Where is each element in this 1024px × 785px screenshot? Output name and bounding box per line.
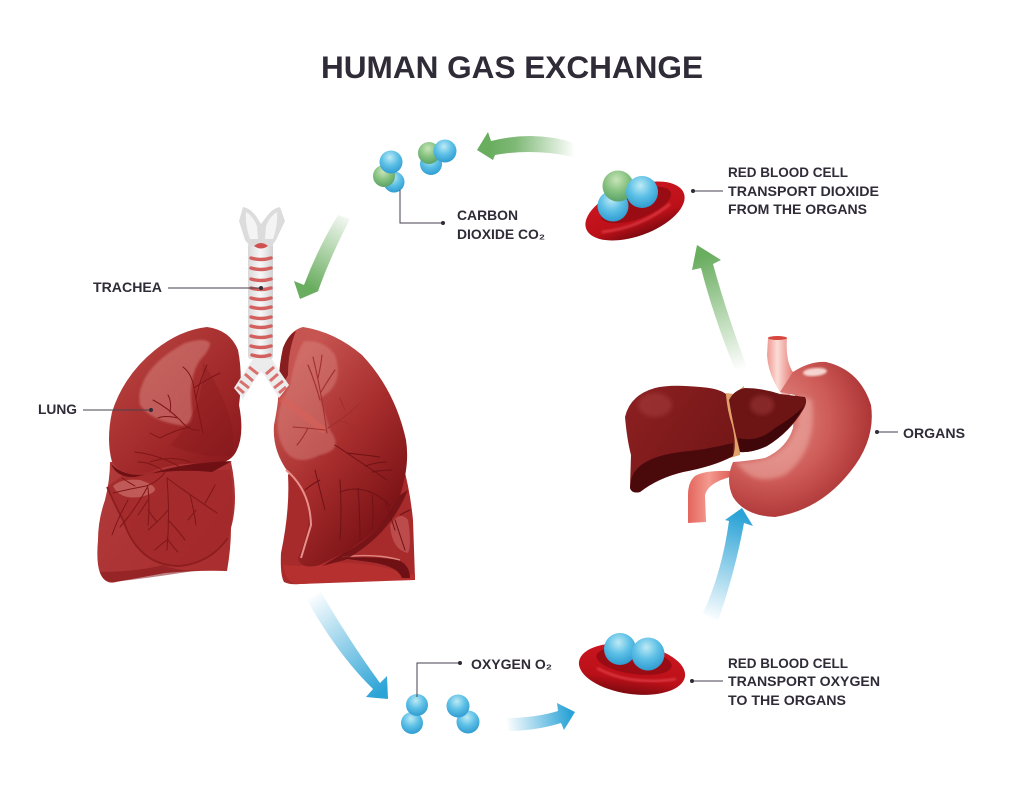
bronchial veins <box>112 365 220 552</box>
arrow: green from organs to red blood cell <box>692 245 748 370</box>
icon: red blood cell carrying carbon dioxide <box>578 170 692 252</box>
label: red blood cell transport dioxide: FROM THE ORGANS <box>728 201 867 217</box>
lower lobe <box>97 462 235 583</box>
label: red blood cell transport dioxide: RED BLOOD CELL <box>728 164 848 180</box>
icon: oxygen molecules <box>401 694 480 734</box>
arrow: blue to red blood cell <box>506 703 575 731</box>
illustration: trachea <box>234 207 289 399</box>
illustration: liver <box>625 386 806 492</box>
label: red blood cell transport oxygen: TO THE ORGANS <box>728 692 846 708</box>
lower lobe <box>281 430 415 584</box>
icon: red blood cell carrying oxygen <box>576 633 688 701</box>
label: red blood cell transport dioxide: TRANSPORT DIOXIDE <box>728 183 879 199</box>
arrow: green to carbon dioxide <box>477 132 574 160</box>
arrow: blue from lungs to oxygen <box>307 592 388 699</box>
label: organs <box>875 425 965 441</box>
label: red blood cell transport oxygen: TRANSPORT OXYGEN <box>728 673 880 689</box>
label: trachea <box>93 279 263 295</box>
windpipe <box>248 243 273 359</box>
illustration: stomach <box>729 336 872 517</box>
label: lung: LUNG <box>38 401 77 417</box>
label: red blood cell transport oxygen: RED BLOOD CELL <box>728 655 848 671</box>
arrow: blue to organs <box>703 508 753 621</box>
larynx <box>239 207 285 246</box>
icon: carbon dioxide molecules <box>373 140 456 192</box>
label: organs: ORGANS <box>903 425 965 441</box>
illustration: duodenum <box>688 471 730 523</box>
label: carbon dioxide: CARBON <box>457 207 518 223</box>
label: lung <box>38 401 153 417</box>
title: HUMAN GAS EXCHANGE <box>321 49 703 85</box>
label: trachea: TRACHEA <box>93 279 162 295</box>
label: oxygen <box>417 656 552 697</box>
label: red blood cell transport dioxide <box>691 164 879 217</box>
bronchi <box>234 356 289 399</box>
label: carbon dioxide <box>400 190 545 242</box>
illustration: right lung <box>274 327 415 584</box>
label: oxygen: OXYGEN O₂ <box>471 656 552 672</box>
illustration: left lung <box>97 327 241 583</box>
label: red blood cell transport oxygen <box>690 655 880 708</box>
label: carbon dioxide: DIOXIDE CO₂ <box>457 226 545 242</box>
bronchial veins <box>293 355 363 445</box>
arrow: green to lungs <box>294 215 350 299</box>
upper lobe <box>274 327 407 566</box>
upper lobe <box>109 327 241 474</box>
